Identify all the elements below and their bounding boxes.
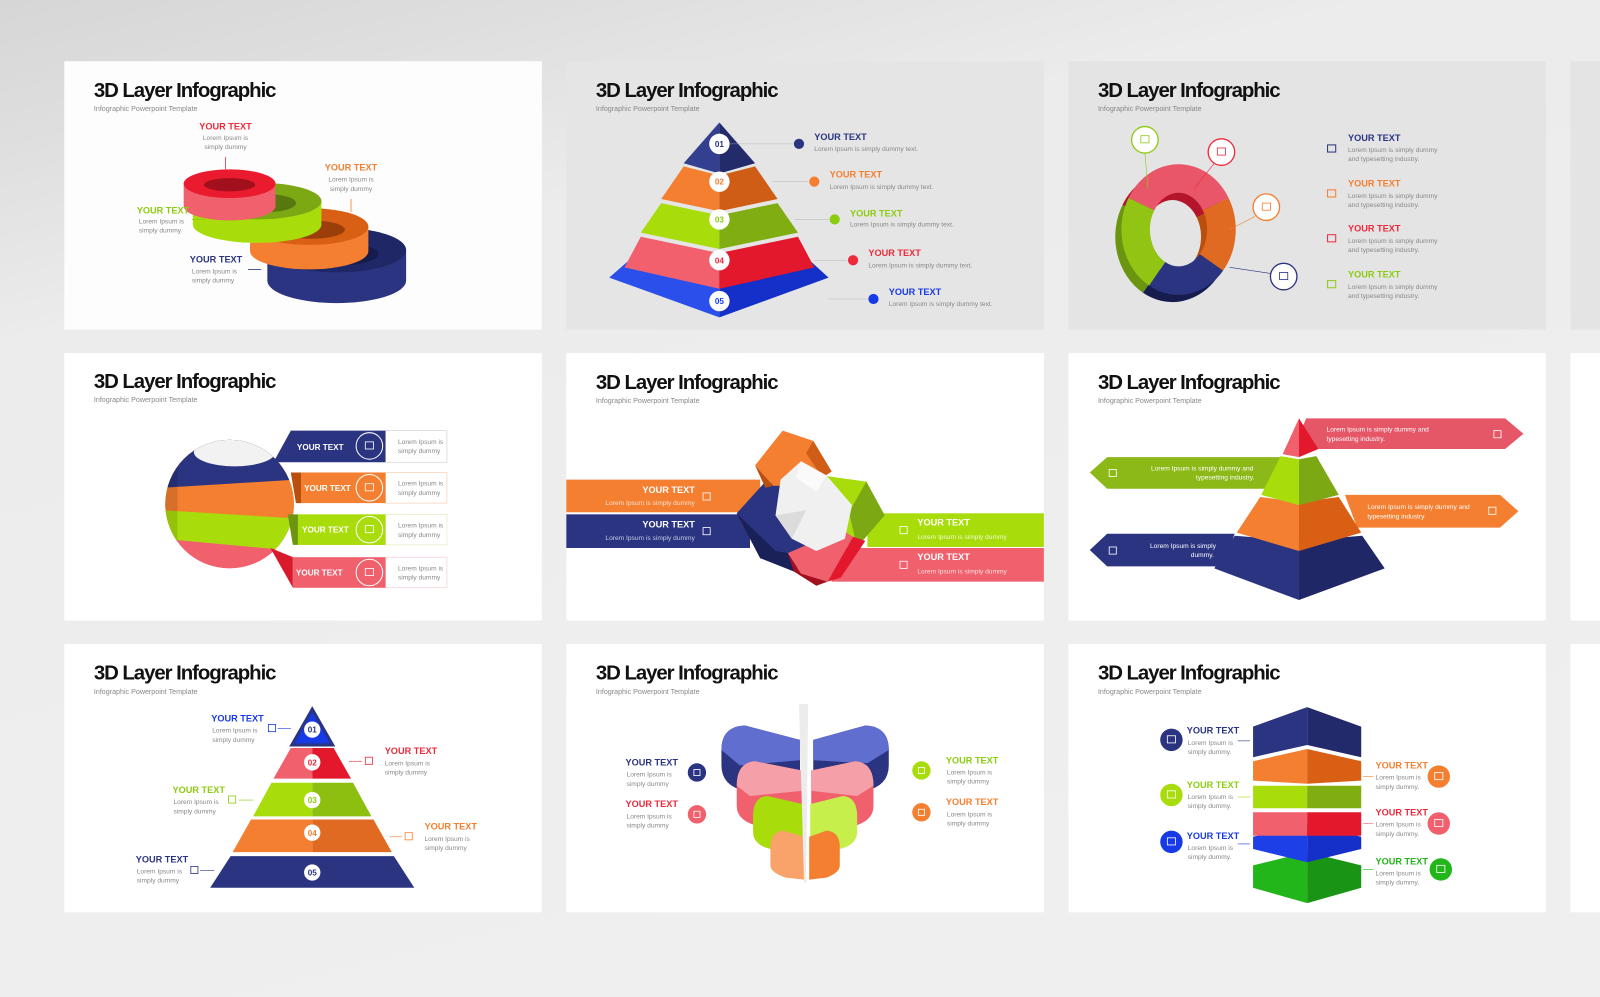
- band orange left: [566, 480, 760, 512]
- labels 8: YOUR TEXT: [946, 755, 999, 765]
- pyramid 7: [210, 709, 414, 888]
- title 7: 3D Layer Infographic: [94, 663, 277, 685]
- band orange left: YOUR TEXT: [642, 485, 695, 495]
- donut legend: YOUR TEXT: [1348, 224, 1401, 234]
- ribbon orange: [291, 472, 447, 503]
- panel: card 9 stacked prisms: [1068, 644, 1546, 912]
- label navy: Lorem Ipsum is: [192, 268, 238, 275]
- labels 8: Lorem Ipsum is: [627, 772, 673, 779]
- arrow orange: Lorem Ipsum is simply dummy and: [1367, 504, 1470, 511]
- band pink right: Lorem Ipsum is simply dummy: [917, 569, 1007, 576]
- labels 8: YOUR TEXT: [946, 797, 999, 807]
- labels 9: simply dummy.: [1376, 831, 1419, 838]
- title 3: 3D Layer Infographic: [1098, 80, 1281, 102]
- label red: [199, 122, 252, 169]
- label red: YOUR TEXT: [199, 122, 252, 132]
- panel: card 3 donut: [1068, 61, 1546, 330]
- subtitle 7: Infographic Powerpoint Template: [94, 688, 198, 696]
- labels 9: Lorem Ipsum is: [1376, 871, 1421, 878]
- ribbon green: simply dummy: [398, 532, 441, 539]
- labels 9: simply dummy.: [1188, 854, 1232, 861]
- arrow green: Lorem Ipsum is simply dummy and: [1151, 465, 1254, 472]
- ribbon navy: YOUR TEXT: [297, 443, 344, 452]
- ribbon navy: [273, 431, 447, 462]
- labels 9: Lorem Ipsum is: [1188, 740, 1234, 747]
- donut legend: Lorem Ipsum is simply dummy: [1348, 284, 1438, 291]
- title 2: 3D Layer Infographic: [596, 80, 779, 102]
- label orange: Lorem Ipsum is: [328, 177, 374, 184]
- list items: Lorem Ipsum is simply dummy text.: [889, 301, 993, 308]
- labels 7: simply dummy: [385, 770, 428, 777]
- labels 9: [1160, 726, 1452, 887]
- donut legend: and typesetting industry.: [1348, 293, 1419, 300]
- donut legend: Lorem Ipsum is simply dummy: [1348, 238, 1438, 245]
- labels 7: Lorem Ipsum is: [385, 760, 431, 767]
- label orange: simply dummy: [330, 186, 373, 193]
- pyramid 7: 03: [308, 796, 317, 805]
- labels 9: YOUR TEXT: [1187, 726, 1240, 736]
- label red: simply dummy: [204, 144, 247, 151]
- label navy: simply dummy: [192, 278, 235, 285]
- title 4: 3D Layer Infographic: [94, 371, 277, 393]
- ribbon orange: YOUR TEXT: [304, 484, 351, 493]
- labels 7: YOUR TEXT: [424, 822, 477, 832]
- labels 8: simply dummy: [627, 781, 670, 788]
- labels 7: simply dummy: [173, 808, 216, 815]
- donut chart: [1130, 179, 1221, 288]
- pyramid: 02: [715, 178, 724, 187]
- arrow navy: [1090, 534, 1235, 566]
- arrow pink: typesetting industry.: [1327, 436, 1385, 443]
- subtitle 8: Infographic Powerpoint Template: [596, 688, 700, 696]
- panel: card 5 cube bands: [566, 353, 1044, 620]
- ribbon green: Lorem Ipsum is: [398, 523, 444, 530]
- donut legend: and typesetting industry.: [1348, 247, 1419, 254]
- pyramid 7: 05: [308, 869, 317, 878]
- band orange left: Lorem Ipsum is simply dummy: [605, 500, 696, 507]
- labels 9: Lorem Ipsum is: [1376, 775, 1421, 782]
- labels 7: Lorem Ipsum is: [424, 836, 470, 843]
- pyramid: 03: [715, 215, 724, 224]
- labels 7: simply dummy: [212, 737, 255, 744]
- donut legend: and typesetting industry.: [1348, 202, 1419, 209]
- labels 9: Lorem Ipsum is: [1188, 845, 1234, 852]
- labels 9: YOUR TEXT: [1376, 760, 1428, 770]
- labels 9: Lorem Ipsum is: [1376, 822, 1421, 829]
- labels 9: simply dummy.: [1376, 784, 1419, 791]
- list items: YOUR TEXT: [814, 132, 867, 142]
- labels 7: YOUR TEXT: [385, 746, 438, 756]
- donut legend: and typesetting industry.: [1348, 156, 1419, 163]
- list items: [730, 132, 993, 308]
- list items: Lorem Ipsum is simply dummy text.: [850, 222, 954, 229]
- ring stack: [184, 169, 406, 303]
- pyramid 7: 01: [308, 726, 317, 735]
- list items: Lorem Ipsum is simply dummy text.: [814, 146, 918, 153]
- title 9: 3D Layer Infographic: [1098, 663, 1281, 685]
- ribbon green: [288, 514, 447, 545]
- list items: Lorem Ipsum is simply dummy text.: [868, 262, 972, 269]
- list items: YOUR TEXT: [868, 248, 921, 258]
- labels 9: YOUR TEXT: [1187, 780, 1240, 790]
- label navy: YOUR TEXT: [190, 254, 243, 264]
- labels 7: Lorem Ipsum is: [212, 728, 258, 735]
- labels 9: simply dummy.: [1376, 880, 1419, 887]
- band green right: [867, 513, 1044, 547]
- labels 8: simply dummy: [947, 779, 990, 786]
- panel: card 1 stacked rings: [64, 61, 542, 330]
- band navy left: Lorem Ipsum is simply dummy: [605, 535, 696, 542]
- labels 7: [136, 713, 477, 885]
- donut icons: [1132, 127, 1297, 290]
- list items: YOUR TEXT: [850, 208, 903, 218]
- title 8: 3D Layer Infographic: [596, 663, 779, 685]
- donut legend: YOUR TEXT: [1348, 133, 1401, 143]
- pyramid: 05: [715, 297, 724, 306]
- pyramid: 01: [715, 140, 724, 149]
- ribbon pink: simply dummy: [398, 575, 441, 582]
- title 6: 3D Layer Infographic: [1098, 372, 1281, 394]
- label navy: [190, 254, 261, 285]
- ribbon pink: [270, 548, 447, 588]
- arrow pink: Lorem Ipsum is simply dummy and: [1327, 427, 1429, 434]
- labels 7: YOUR TEXT: [136, 854, 189, 864]
- labels 9: simply dummy.: [1188, 803, 1232, 810]
- pyramid 7: 02: [308, 758, 317, 767]
- donut legend: YOUR TEXT: [1348, 179, 1401, 189]
- labels 7: Lorem Ipsum is: [137, 869, 183, 876]
- band navy left: YOUR TEXT: [642, 520, 695, 530]
- ribbon pink: Lorem Ipsum is: [398, 565, 444, 572]
- prism stack: [1253, 707, 1361, 903]
- panel: card 7 numbered pyramid: [64, 644, 542, 912]
- label green: simply dummy: [139, 228, 182, 235]
- labels 9: simply dummy.: [1188, 749, 1232, 756]
- band navy left: [566, 514, 750, 548]
- labels 9: YOUR TEXT: [1376, 856, 1428, 866]
- ribbon navy: simply dummy: [398, 448, 441, 455]
- pyramid: [609, 122, 829, 317]
- labels 9: YOUR TEXT: [1376, 807, 1428, 817]
- pyramid: 04: [715, 256, 724, 265]
- band pink right: YOUR TEXT: [917, 552, 970, 562]
- title 1: 3D Layer Infographic: [94, 80, 277, 102]
- label green: [137, 205, 205, 235]
- labels 9: Lorem Ipsum is: [1188, 794, 1234, 801]
- ribbon navy: Lorem Ipsum is: [398, 439, 444, 446]
- subtitle 5: Infographic Powerpoint Template: [596, 397, 700, 405]
- labels 8: [626, 755, 999, 830]
- ribbon green: YOUR TEXT: [302, 526, 349, 535]
- layered pyramid: [1214, 418, 1385, 600]
- panel: partial cards right column: [1570, 61, 1600, 912]
- arrow navy: Lorem Ipsum is simply: [1150, 543, 1217, 550]
- panel: card 6 pyramid arrows: [1068, 353, 1546, 620]
- donut legend: YOUR TEXT: [1348, 270, 1401, 280]
- subtitle 2: Infographic Powerpoint Template: [596, 105, 700, 113]
- label orange: [325, 162, 378, 212]
- arrow navy: dummy.: [1191, 552, 1214, 559]
- ribbon orange: simply dummy: [398, 490, 441, 497]
- band green right: Lorem Ipsum is simply dummy: [917, 534, 1007, 541]
- list items: Lorem Ipsum is simply dummy text.: [830, 184, 934, 191]
- labels 7: YOUR TEXT: [211, 713, 264, 723]
- panel: card 4 sphere: [64, 353, 542, 620]
- labels 8: Lorem Ipsum is: [627, 813, 673, 820]
- subtitle 6: Infographic Powerpoint Template: [1098, 397, 1202, 405]
- subtitle 3: Infographic Powerpoint Template: [1098, 105, 1202, 113]
- labels 8: YOUR TEXT: [626, 799, 678, 809]
- donut legend: Lorem Ipsum is simply dummy: [1348, 147, 1438, 154]
- labels 9: YOUR TEXT: [1187, 831, 1240, 841]
- labels 8: simply dummy: [627, 823, 670, 830]
- label green: YOUR TEXT: [137, 205, 190, 215]
- cube cluster: [737, 431, 885, 586]
- band green right: YOUR TEXT: [917, 518, 970, 528]
- labels 8: simply dummy: [947, 821, 990, 828]
- ribbon orange: Lorem Ipsum is: [398, 481, 444, 488]
- labels 7: Lorem Ipsum is: [173, 799, 219, 806]
- donut legend: Lorem Ipsum is simply dummy: [1348, 193, 1438, 200]
- subtitle 4: Infographic Powerpoint Template: [94, 396, 198, 404]
- arrow orange: [1345, 495, 1518, 528]
- labels 8: Lorem Ipsum is: [947, 811, 993, 818]
- pyramid 7: 04: [308, 829, 317, 838]
- label red: Lorem Ipsum is: [203, 135, 249, 142]
- donut legend: [1328, 133, 1438, 300]
- split stack shape: [721, 704, 889, 883]
- labels 8: YOUR TEXT: [626, 757, 678, 767]
- arrow orange: typesetting industry: [1367, 513, 1425, 520]
- panel: card 8 split stack: [566, 644, 1044, 912]
- band pink right: [832, 548, 1044, 582]
- label orange: YOUR TEXT: [325, 162, 378, 172]
- arrow green: typesetting industry.: [1196, 475, 1255, 482]
- arrow green: [1090, 457, 1288, 489]
- list items: YOUR TEXT: [889, 287, 942, 297]
- labels 8: Lorem Ipsum is: [947, 770, 993, 777]
- labels 7: simply dummy: [424, 845, 468, 852]
- arrow pink: [1294, 418, 1523, 449]
- subtitle 1: Infographic Powerpoint Template: [94, 105, 198, 113]
- panel: card 2 pyramid list: [566, 61, 1044, 330]
- labels 7: simply dummy: [137, 878, 180, 885]
- list items: YOUR TEXT: [830, 170, 882, 180]
- ribbon pink: YOUR TEXT: [296, 569, 343, 578]
- label green: Lorem Ipsum is: [139, 218, 185, 225]
- sphere: [163, 438, 296, 571]
- title 5: 3D Layer Infographic: [596, 372, 779, 394]
- subtitle 9: Infographic Powerpoint Template: [1098, 688, 1202, 696]
- labels 7: YOUR TEXT: [172, 785, 225, 795]
